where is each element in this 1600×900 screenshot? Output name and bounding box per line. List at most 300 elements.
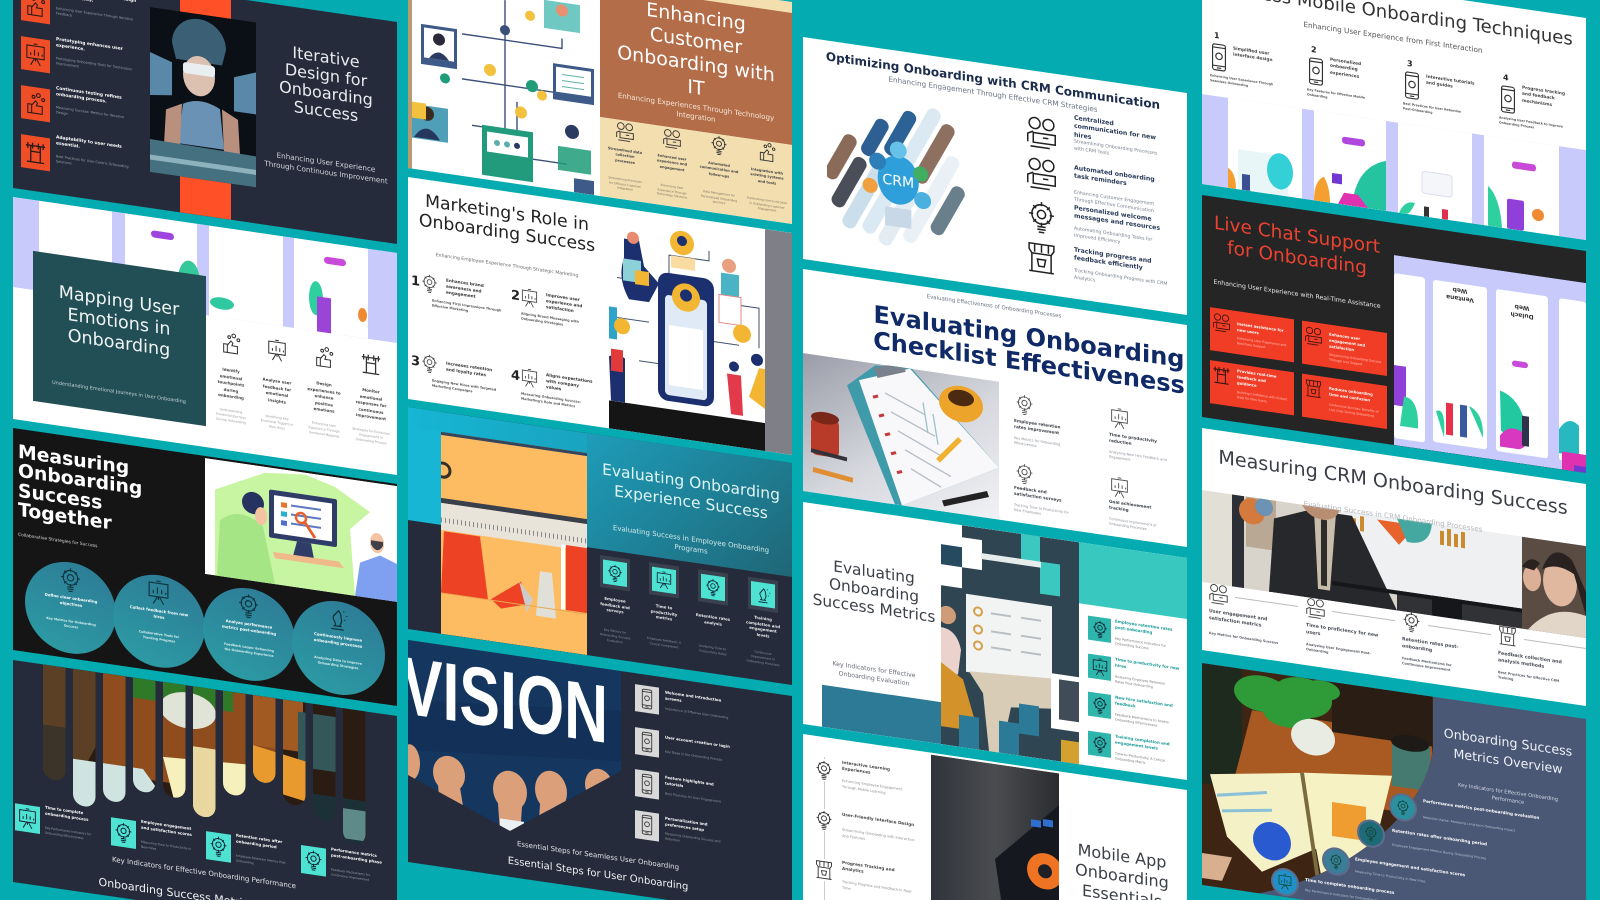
- panel: enhancing customer onboarding slide: [408, 0, 792, 224]
- metric: retention: Employee retention rates: [1115, 619, 1172, 632]
- title: Essential Steps for User Onboarding: [508, 856, 688, 893]
- column: productivity: metrics: [656, 614, 672, 622]
- column: analyze: emotional: [266, 390, 288, 398]
- icon: [268, 340, 286, 362]
- icon: [520, 287, 539, 309]
- column: retention: Analyzing Time-to-: [699, 643, 727, 652]
- column: integration: [746, 143, 788, 213]
- panel: mobile app essentials slide: [803, 734, 1187, 900]
- item: automated reminders: Automated onboarding: [1074, 165, 1155, 183]
- metric: retention rates: onboarding period: [236, 838, 277, 849]
- technique 2: experiences: [1330, 70, 1359, 80]
- item: retention: Key Metrics for Onboarding: [1014, 436, 1060, 447]
- icon tile: [21, 85, 50, 122]
- technique 3: [1395, 55, 1491, 131]
- circle: continuously improve: [292, 595, 385, 701]
- icon: [362, 354, 380, 376]
- step: account: [635, 727, 785, 781]
- item 3: Engaging New Hires with Targeted: [432, 379, 496, 392]
- step: features: Best Practices for User Engagement: [665, 791, 721, 804]
- milestone: engagement: Employee engagement and satisfaction scores: [1355, 856, 1465, 877]
- column: design: positive: [315, 400, 333, 407]
- subtitle: Essential Steps for Seamless User Onboarding: [517, 840, 679, 872]
- item: interactive learning: Through Mobile Learning: [842, 784, 885, 795]
- metric: productivity: hires: [1115, 663, 1126, 669]
- step: features: tutorials: [665, 780, 683, 788]
- item 3: Increases retention: [446, 361, 492, 372]
- title: Design for: [285, 60, 367, 91]
- item 4: Marketing's Role and Metrics: [521, 396, 575, 408]
- title: IT: [687, 75, 705, 100]
- metric: retention rates: Retention rates after: [236, 833, 282, 844]
- metric: employee engagement: Employee engagement: [141, 819, 191, 831]
- photo: vision hands: [408, 640, 621, 831]
- milestone: performance: Retention Rates: Assessing Long-term Onboarding Impact: [1423, 815, 1515, 833]
- icon: [1403, 70, 1421, 103]
- item: automated reminders: task reminders: [1074, 173, 1127, 188]
- blue corner block: [822, 685, 941, 744]
- column: retention: [688, 568, 738, 675]
- item: tracking progress: Tracking progress and: [1074, 247, 1152, 265]
- vertical timeline line: [824, 757, 825, 900]
- card: enhances engagement: [1302, 321, 1387, 376]
- card: enhances engagement: engagement and: [1329, 337, 1365, 348]
- metric: retention: Onboarding Success: [1115, 642, 1149, 651]
- title: for Onboarding: [1227, 238, 1367, 279]
- panel: iterative design slide: [13, 0, 397, 244]
- title: Onboarding: [279, 77, 373, 109]
- metric: satisfaction: Onboarding Effectiveness: [1115, 718, 1157, 728]
- column: feedback: surveys: [606, 607, 624, 615]
- card: reduces time: [1302, 374, 1387, 429]
- icon tile: [15, 803, 40, 834]
- circle: analyze metrics: Analyze performance: [226, 618, 272, 630]
- item: centralized communication: hires: [1074, 131, 1091, 141]
- step: personalization: [635, 810, 785, 864]
- photo: meeting with whiteboard: [941, 522, 1079, 764]
- column: feedback: Evaluation: [607, 638, 623, 644]
- photo: ruler on orange: [441, 432, 587, 655]
- item: interface design: [811, 807, 929, 864]
- metric: productivity: Time to productivity for new: [1115, 657, 1179, 671]
- subtitle: Key Indicators for Effective: [832, 660, 916, 679]
- column: feedback: Employee: [604, 596, 626, 604]
- circle: collect feedback: [113, 569, 205, 674]
- card: enhances engagement: Streamlining Onboarding Success: [1329, 353, 1381, 364]
- icon: [712, 136, 726, 156]
- lavender banner with phone cards: [13, 197, 397, 343]
- metric: retention: Key Performance Indicators for: [1115, 637, 1166, 648]
- metric: time to complete: Time to complete: [45, 805, 83, 815]
- item: centralized communication: with CRM Tools: [1074, 147, 1109, 157]
- list item: iterative feedback: [21, 0, 136, 24]
- title: Onboarding: [18, 461, 142, 500]
- teal header block: [1079, 542, 1187, 619]
- list item: continuous testing: Design: [56, 110, 68, 116]
- list item: prototyping: [21, 36, 132, 74]
- column: enhanced user experience: [656, 129, 687, 200]
- column: integration: Engagement: [758, 206, 776, 213]
- subtitle: Enhancing User Experience: [277, 150, 375, 174]
- icon: [331, 610, 348, 631]
- item: interactive learning: [811, 757, 929, 814]
- technique 3: 3: [1407, 59, 1413, 69]
- column: streamlined data: collection: [615, 153, 635, 159]
- item: tracking progress: feedback efficiently: [1074, 255, 1143, 272]
- icon: [1014, 393, 1035, 417]
- connector line: [1524, 639, 1586, 649]
- column: training: engagement: [749, 625, 777, 634]
- title: Evaluating: [833, 557, 915, 587]
- subtitle: Key Indicators for Effective Onboarding Performance: [112, 855, 296, 890]
- technique 4: and feedback: [1522, 92, 1555, 102]
- column: design: emotions: [314, 406, 334, 414]
- icon: [1304, 325, 1323, 347]
- item: tracking progress: [1025, 239, 1185, 305]
- circle: analyze metrics: metrics post-onboarding: [222, 623, 276, 636]
- title: [602, 460, 780, 525]
- icon: [1305, 596, 1326, 620]
- metric: retention rates: Onboarding: [236, 858, 254, 865]
- column: productivity: Employee Feedback: A: [647, 636, 681, 645]
- column: retention: Retention rates: [696, 612, 730, 622]
- column: streamlined data: Streamlining Processes: [608, 175, 642, 184]
- icon: [1210, 42, 1228, 75]
- item 3: Marketing Campaigns: [432, 384, 472, 393]
- connector line: [1332, 611, 1395, 621]
- title: Mapping User: [59, 283, 179, 320]
- photo: CRM diagonal pills: [827, 93, 977, 274]
- cyan top strip: [408, 407, 792, 483]
- column: enhanced user experience: Enhancing User: [661, 183, 683, 190]
- metric: time to complete: Onboarding Effectiveness: [45, 830, 83, 840]
- title: Onboarding: [68, 326, 170, 361]
- card: real-time feedback: Provides real-time: [1237, 368, 1276, 379]
- icon: [148, 580, 168, 606]
- icon: [420, 273, 439, 295]
- column: training: Continuous: [755, 650, 771, 656]
- column: automated communication: Automated: [708, 161, 730, 168]
- item: retention: Employee retention: [1014, 418, 1060, 430]
- icon: [814, 758, 834, 783]
- card: reduces time: Reduces onboarding: [1329, 386, 1373, 397]
- column: analyze: feedback for: [263, 383, 291, 392]
- title: Optimizing Onboarding with CRM Communication: [826, 49, 1160, 112]
- list item: adaptability: essential.: [56, 141, 80, 150]
- metric: engagement: satisfaction metrics: [1209, 616, 1261, 629]
- panel: checklist effectiveness slide: [803, 269, 1187, 547]
- column: training: Onboarding Processes: [746, 658, 780, 667]
- column: retention: analysis: [704, 619, 722, 626]
- title: Mobile App: [1078, 840, 1166, 872]
- list item: adaptability: Best Practices for User-Centric Onboarding: [56, 154, 129, 169]
- milestone: time to complete: Time to complete onboarding process: [1305, 877, 1394, 895]
- metric: performance: Feedback Mechanisms for: [331, 867, 370, 877]
- subtitle: Performance: [1492, 795, 1524, 806]
- icon: [1025, 113, 1058, 151]
- subtitle: Enhancing Employee Experience Through Strategic Marketing: [436, 253, 578, 279]
- item: goal achievement: [1108, 472, 1187, 546]
- metric: engagement: Key Metrics for Onboarding Success: [1209, 631, 1278, 645]
- icon: [1208, 582, 1229, 606]
- icon: [814, 808, 834, 833]
- list item: adaptability: [21, 134, 129, 172]
- kicker: Evaluating Effectiveness of Onboarding Processes: [927, 294, 1061, 320]
- column: identify: During Onboarding: [216, 416, 246, 425]
- step: welcome: Welcome and introduction: [665, 689, 721, 703]
- metric: performance: Performance metrics: [331, 846, 377, 858]
- item: automated reminders: [1025, 154, 1185, 220]
- step: welcome: screens: [665, 695, 682, 703]
- metric: satisfaction: [1088, 692, 1185, 740]
- metric: training: engagement levels: [1115, 740, 1158, 751]
- circle: define objectives: Success: [64, 624, 78, 630]
- item: centralized communication: Centralized: [1074, 115, 1114, 127]
- item: feedback: New Employees: [1014, 508, 1041, 516]
- milestone: engagement: Measuring Time to Productivity in New Hires: [1355, 869, 1426, 884]
- icon tile: [635, 727, 659, 758]
- step: account: Key Steps in the Onboarding Process: [665, 749, 722, 762]
- icon: [1109, 476, 1130, 500]
- title: [18, 442, 142, 535]
- icon: [1014, 462, 1035, 486]
- metric: proficiency: Analyzing User Engagement Post-: [1306, 642, 1371, 656]
- column: design: enhance: [314, 393, 334, 401]
- subtitle: Programs: [674, 542, 708, 555]
- column: integration: Integration with: [751, 167, 783, 176]
- tan edge: [408, 0, 412, 169]
- photo: presenter and dashboard: [1202, 490, 1586, 638]
- card: real-time feedback: [1210, 360, 1294, 415]
- item: personalized welcome: messages and resources: [1074, 213, 1160, 232]
- title: Success Metrics: [813, 590, 935, 626]
- title: Experience Success: [614, 482, 768, 522]
- item: retention: [1011, 389, 1096, 464]
- title: Onboarding Success: [1444, 725, 1572, 759]
- panel: evaluating success metrics slide: [803, 502, 1187, 780]
- column: training: levels: [757, 632, 769, 639]
- item 2: Aligning Brand Messaging with: [521, 311, 579, 324]
- metric: proficiency: [1305, 596, 1400, 672]
- milestone: retention: Employee Engagement Metrics During Onboarding Process: [1392, 843, 1486, 860]
- column: analyze: Analyze user: [263, 376, 291, 386]
- circle: continuously improve: Analyzing Data to Improve: [314, 655, 362, 666]
- photo: checklist on desk: [803, 353, 999, 520]
- subtitle: Through Continuous Improvement: [264, 159, 388, 186]
- panel: mobile onboarding techniques slide: [1202, 0, 1586, 240]
- metric: feedback: Training: [1498, 676, 1513, 682]
- photo: CRM diagonal pills: CRM: [882, 171, 914, 192]
- metric: training: Time-to-Productivity: A Critical: [1115, 752, 1165, 763]
- item: progress tracking: Tracking Progress and Feedback in Real-: [842, 880, 912, 894]
- phone screens strip: [1202, 94, 1586, 240]
- item 3: and loyalty rates: [446, 367, 486, 377]
- metric: retention: Feedback Mechanisms for: [1402, 656, 1452, 667]
- icon tile: [1088, 692, 1111, 719]
- metric: retention rates: Employee Retention Metrics Post-: [236, 854, 286, 865]
- photo: desk with plant and notebook: [1202, 663, 1433, 894]
- icon: [1212, 364, 1231, 386]
- title: [1444, 724, 1572, 780]
- column: identify: emotional: [220, 373, 242, 381]
- list item: adaptability: Adaptability to user needs: [56, 135, 122, 150]
- item 1: 1: [411, 273, 420, 290]
- column: retention: Productivity Rates: [699, 649, 727, 656]
- icon: [61, 568, 80, 592]
- title: Marketing's Role in: [425, 191, 589, 235]
- metric: retention: onboarding: [1402, 645, 1432, 654]
- subtitle: Onboarding Evaluation: [839, 670, 909, 687]
- icon: [814, 858, 834, 883]
- title: Onboarding Success: [419, 211, 595, 256]
- column: feedback: [590, 554, 640, 661]
- column: integration: existing systems: [750, 172, 784, 181]
- icon: [1304, 378, 1323, 400]
- metric: training: Onboarding Metric: [1115, 757, 1146, 765]
- icon tile: [698, 569, 728, 606]
- lavender app screens: [1394, 255, 1586, 473]
- technique 4: Analyzing User Feedback to Improve: [1499, 115, 1563, 129]
- card: reduces time: Live Chat During Onboarding: [1329, 408, 1374, 418]
- list item: continuous testing: onboarding process.: [56, 92, 107, 105]
- column: monitor: Strategies for Emotional: [352, 426, 390, 436]
- technique 1: interface design: [1233, 53, 1273, 64]
- item: goal achievement: Continuous Improvement of: [1109, 517, 1156, 528]
- metric: productivity: [1088, 654, 1185, 702]
- orange strip: [180, 0, 231, 220]
- technique 4: 4: [1503, 73, 1509, 83]
- circle: analyze metrics: Feedback Loops: Enhancing: [224, 642, 274, 653]
- step: account: User account creation or login: [665, 734, 730, 749]
- metric: retention: Retention rates post-: [1402, 637, 1458, 650]
- metric: feedback: Feedback collection and: [1498, 651, 1562, 665]
- subtitle: Evaluating Success in Employee Onboarding: [613, 524, 769, 555]
- list item: adaptability: Solutions: [56, 159, 72, 166]
- subtitle: Enhancing User Experience from First Interaction: [1303, 20, 1483, 55]
- lavender app screens: Web: [1514, 303, 1529, 312]
- metric: productivity: Rates Post-Onboarding: [1115, 680, 1153, 689]
- item 2: [511, 284, 611, 344]
- title: Measuring CRM Onboarding Success: [1218, 445, 1568, 519]
- step: personalization: Measuring Onboarding Success and: [665, 831, 720, 844]
- item 1: Enhances brand: [446, 278, 484, 288]
- card: real-time feedback: Building Confidence with Instant: [1237, 390, 1287, 401]
- step: features: [635, 769, 785, 823]
- icon badge: [1391, 794, 1415, 821]
- item: productivity: [1108, 403, 1187, 477]
- icon tile: [21, 36, 50, 73]
- list item: continuous testing: [21, 85, 124, 122]
- panel: measuring onboarding together slide: [13, 428, 397, 706]
- icon: [1025, 154, 1058, 192]
- metric: employee engagement: New Hires: [141, 844, 156, 850]
- card: instant assistance: Real-Time Support: [1237, 341, 1265, 349]
- circle: define objectives: Key Metrics for Onboarding: [46, 616, 96, 627]
- column: automated communication: Journeys: [713, 200, 725, 205]
- icon tile: [1088, 616, 1111, 643]
- title: [617, 0, 775, 100]
- technique 2: onboarding: [1330, 64, 1358, 73]
- list item: continuous testing: Continuous testing refines: [56, 86, 122, 101]
- metric: retention: post-onboarding: [1115, 625, 1152, 635]
- step: personalization: Personalization and: [665, 815, 707, 827]
- column: monitor: Onboarding Process: [356, 437, 386, 445]
- item: productivity: Analyzing New Hire Feedback and: [1109, 450, 1167, 462]
- illustration: phone and people: [609, 230, 765, 416]
- column: productivity: productivity: [651, 608, 677, 617]
- column: monitor: emotional: [360, 393, 382, 401]
- milestone: retention: Retention rates after onboarding period: [1392, 828, 1487, 847]
- icon: [1025, 239, 1058, 277]
- column: integration: and tools: [758, 179, 776, 186]
- column: identify: [216, 334, 246, 425]
- item 1: Effective Marketing: [432, 304, 468, 313]
- technique 1: Enhancing User Experience Through: [1210, 73, 1273, 86]
- milestone: performance: [1391, 794, 1586, 848]
- lavender app screens: Ventana: [1446, 293, 1474, 304]
- circle: collect feedback: Collect feedback from new: [130, 604, 188, 618]
- technique 4: [1491, 69, 1586, 145]
- icon tile: [206, 831, 231, 863]
- item: tracking progress: Tracking Onboarding Progress with CRM: [1074, 269, 1167, 287]
- icon: [239, 594, 258, 618]
- title: Metrics Overview: [1453, 745, 1562, 776]
- panel: measuring CRM success slide: [1202, 428, 1586, 706]
- title: Success: [18, 481, 102, 514]
- item 1: awareness and: [446, 284, 482, 294]
- column: automated communication: [700, 136, 738, 205]
- panel: onboarding experience success slide: [408, 407, 792, 685]
- metric: employee engagement: Measuring Time to Productivity in: [141, 840, 191, 851]
- circle: continuously improve: Continuously improve: [314, 631, 362, 643]
- column: training: completion and: [746, 619, 780, 629]
- column: training: [738, 575, 788, 682]
- card: real-time feedback: Help for New Users: [1237, 395, 1267, 403]
- photo strips: [43, 664, 366, 844]
- icon badge: [1324, 848, 1348, 875]
- column: identify: touchpoints: [218, 379, 244, 388]
- title: Together: [18, 500, 112, 535]
- icon badge: [1359, 820, 1383, 847]
- item: personalized welcome: Personalized welcome: [1074, 205, 1152, 223]
- technique 3: Post-Onboarding: [1403, 106, 1432, 115]
- step: welcome: Importance of Effective User Onboarding: [665, 706, 728, 720]
- icon tile: [635, 810, 659, 842]
- subtitle: [832, 660, 916, 689]
- circle: continuously improve: onboarding processes: [314, 637, 362, 649]
- lavender app screens: Dulach: [1510, 310, 1534, 320]
- technique 2: Key Features for Effective Mobile: [1307, 87, 1365, 100]
- metric: proficiency: Time to proficiency for new: [1306, 623, 1378, 639]
- panel: metrics overview slide: [1202, 663, 1586, 900]
- column: enhanced user experience: Experience Through: [657, 187, 687, 195]
- subtitle: Enhancing Engagement Through Effective CRM Strategies: [888, 74, 1098, 114]
- card: reduces time: Continuous Success: Benefits of: [1329, 403, 1379, 414]
- column: productivity: Crucial Component: [650, 641, 678, 649]
- circle: collect feedback: Collaborative Tools for: [139, 629, 179, 639]
- icon: [1401, 610, 1422, 634]
- step: personalization: preferences setup: [665, 821, 704, 832]
- milestone: performance: Performance metrics post-onboarding evaluation: [1423, 798, 1539, 820]
- technique 3: Best Practices for User Retention: [1403, 101, 1461, 114]
- metric: satisfaction: feedback: [1115, 701, 1136, 709]
- column: identify: Understanding: [220, 407, 242, 414]
- item 4: with company: [546, 378, 579, 388]
- column: monitor: responses for: [356, 399, 386, 409]
- list item: prototyping: Prototyping enhances user: [56, 37, 123, 52]
- item: automated reminders: Through Effective Communication: [1074, 198, 1154, 214]
- circle: define objectives: Define clear onboarding: [45, 592, 97, 604]
